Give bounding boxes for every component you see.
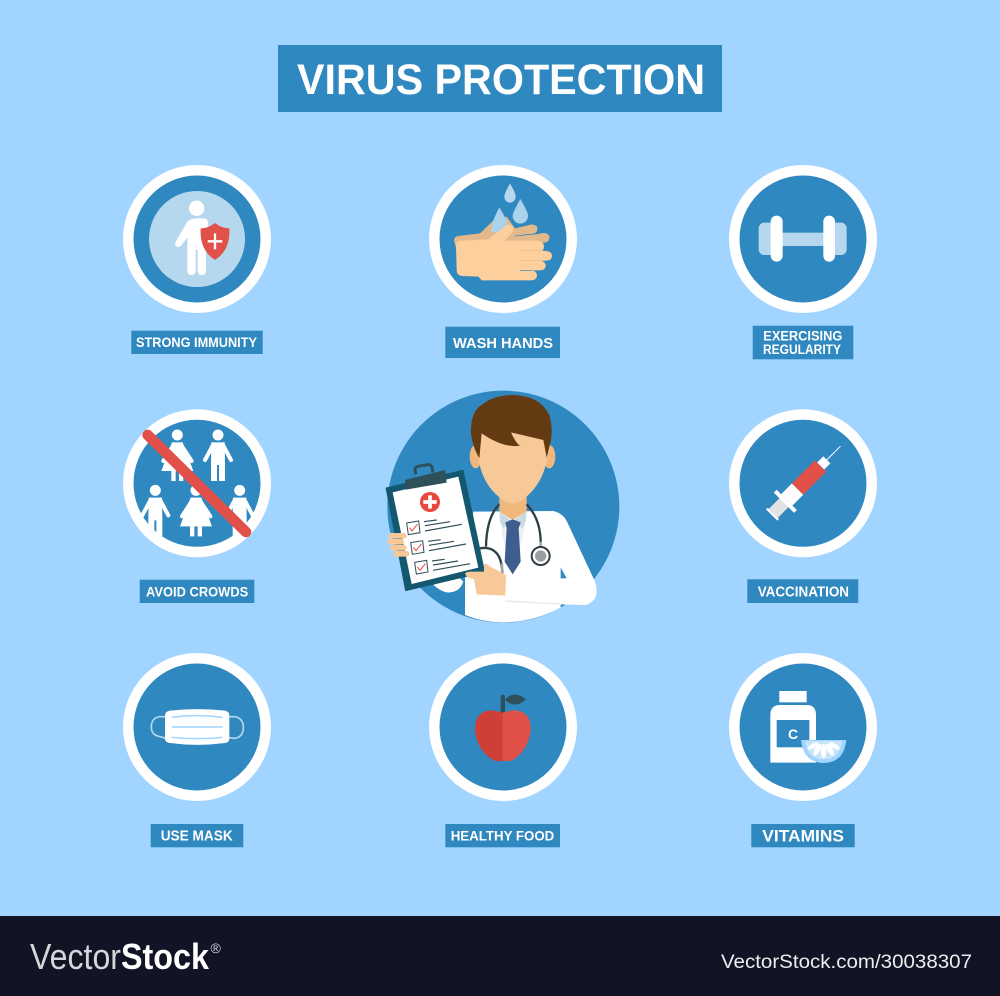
label: strong immunity <box>131 331 263 354</box>
label: use mask: USE MASK <box>161 829 233 845</box>
panel: strong immunity <box>123 165 271 354</box>
icon: vitamin bottle and citrus slice: C <box>788 726 798 742</box>
panel: vaccination <box>729 409 877 603</box>
label: vaccination <box>747 579 858 603</box>
doctor background circle <box>387 391 619 623</box>
footer logo: ® <box>210 940 222 956</box>
label: vaccination: VACCINATION <box>758 584 849 600</box>
icon: face mask <box>151 709 243 745</box>
footer logo: Vector <box>30 936 121 977</box>
label: wash hands <box>445 327 560 358</box>
hand: thumb on clipboard <box>465 564 506 596</box>
panel: use mask <box>123 653 271 847</box>
panel: exercising regularly <box>729 165 877 359</box>
label: vitamins: VITAMINS <box>762 827 844 846</box>
label: avoid crowds <box>140 580 254 603</box>
label: strong immunity: STRONG IMMUNITY <box>136 334 258 350</box>
panel: wash hands <box>429 165 577 358</box>
icon: crowd of people crossed out <box>142 429 253 536</box>
footer logo <box>30 936 222 977</box>
panel: doctor illustration <box>387 391 619 623</box>
panel: vitamins <box>729 653 877 847</box>
label: vitamins <box>751 824 855 847</box>
label: exercising regularly: REGULARITY <box>763 342 841 357</box>
icon: person with shield <box>175 201 229 275</box>
icon: syringe <box>762 436 851 525</box>
panel: avoid crowds <box>123 409 271 603</box>
title: VIRUS PROTECTION <box>297 56 705 104</box>
label: use mask <box>151 824 243 847</box>
hand: fingers over clipboard edge <box>387 533 409 557</box>
icon: dumbbell <box>759 216 847 262</box>
label: exercising regularly <box>753 326 853 359</box>
stethoscope <box>480 504 550 573</box>
label: healthy food: HEALTHY FOOD <box>451 828 554 844</box>
label: avoid crowds: AVOID CROWDS <box>146 583 248 599</box>
clipboard checklist <box>387 465 484 590</box>
doctor figure <box>433 395 597 622</box>
label: healthy food <box>445 824 560 847</box>
head <box>470 445 482 468</box>
icon: apple <box>475 694 531 761</box>
icon: vitamin bottle and citrus slice <box>770 691 846 763</box>
label: exercising regularly: EXERCISING <box>763 329 842 344</box>
label: wash hands: WASH HANDS <box>453 335 553 352</box>
icon: washing hands and water drops <box>454 183 552 280</box>
footer logo: Stock <box>121 936 210 977</box>
footer image id: VectorStock.com/30038307 <box>721 952 972 973</box>
panel: healthy food <box>429 653 577 847</box>
footer bar <box>0 916 1000 996</box>
title <box>278 45 722 112</box>
